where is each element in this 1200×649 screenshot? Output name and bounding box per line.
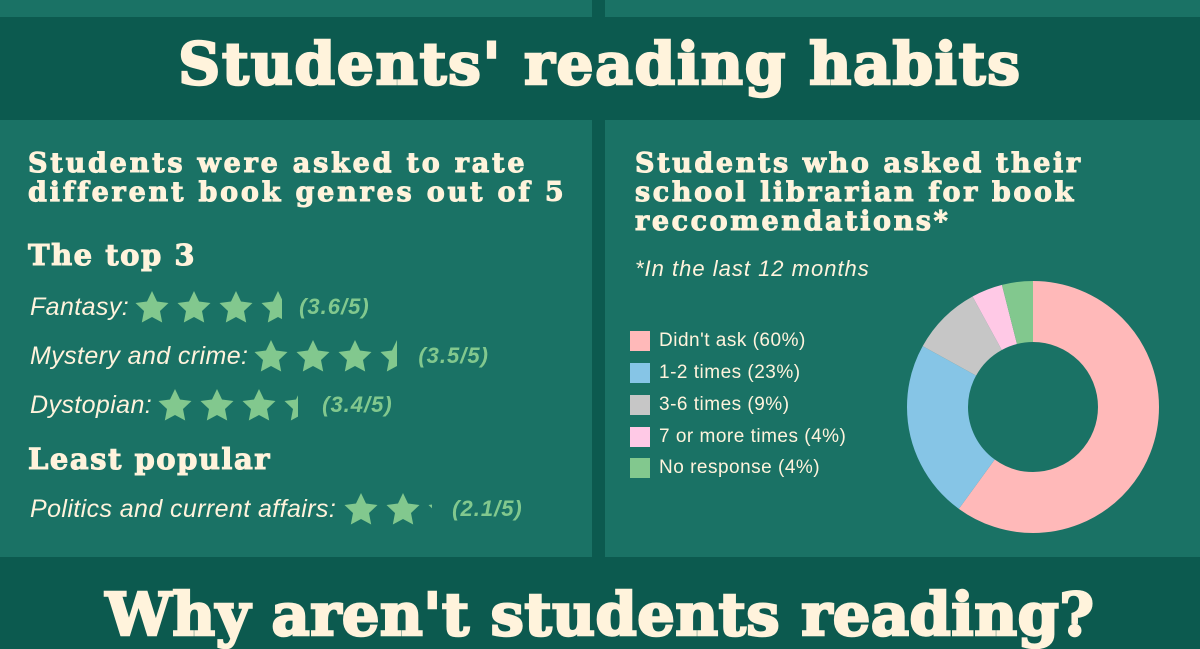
row: mystery: [30, 340, 489, 372]
row: dystopian: (3.4/5): [322, 392, 393, 417]
row: fantasy: (3.6/5): [299, 294, 370, 319]
title: Students' reading habits: [178, 30, 1022, 98]
donut chart: [907, 281, 1159, 533]
heading: genre ratings: [28, 148, 566, 208]
bottom title: Why aren't students reading?: [106, 580, 1094, 649]
row: mystery: Mystery and crime:: [30, 342, 248, 370]
row: politics: (2.1/5): [452, 496, 523, 521]
heading: genre ratings: Students were asked to rate: [28, 148, 527, 179]
heading: librarian: school librarian for book: [635, 177, 1076, 208]
panel: librarian recommendations: [605, 120, 1200, 557]
row: politics: [30, 493, 523, 524]
row: fantasy: [30, 291, 370, 322]
subheading: top 3: The top 3: [28, 238, 196, 272]
subheading: least popular: Least popular: [28, 442, 271, 476]
heading: genre ratings: different book genres out of 5: [28, 177, 566, 208]
legend: 3-6 times (9%): [659, 394, 790, 415]
heading: librarian: Students who asked their: [635, 148, 1083, 179]
legend: [630, 330, 846, 478]
row: fantasy: Fantasy:: [30, 292, 129, 320]
heading: librarian: reccomendations*: [635, 206, 950, 237]
panel: genre ratings: [0, 120, 592, 557]
row: dystopian: Dystopian:: [30, 390, 152, 418]
footnote: *In the last 12 months: [635, 256, 870, 281]
legend: 1-2 times (23%): [659, 362, 801, 383]
row: mystery: (3.5/5): [418, 343, 489, 368]
heading: librarian: [635, 148, 1083, 237]
row: politics: Politics and current affairs:: [30, 494, 336, 522]
legend: 7 or more times (4%): [659, 426, 846, 447]
legend: Didn't ask (60%): [659, 330, 806, 351]
row: dystopian: [30, 389, 393, 420]
legend: No response (4%): [659, 457, 820, 478]
